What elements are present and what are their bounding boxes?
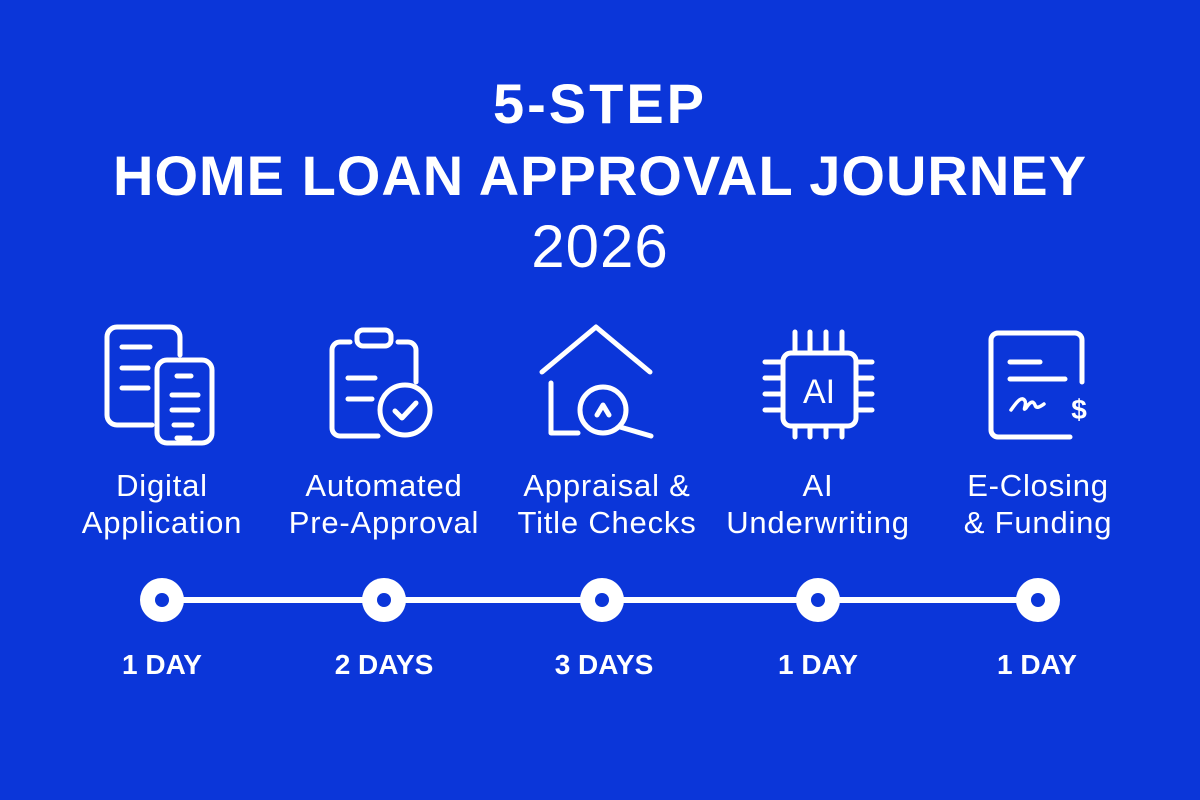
icon: clipboard check [332, 330, 430, 436]
label: step 2 [289, 468, 479, 540]
icon: AI chip [765, 332, 872, 437]
timeline [140, 578, 1060, 622]
step labels [82, 468, 1112, 540]
icon: documents [107, 327, 212, 443]
label: step 3: Appraisal & [523, 468, 691, 503]
label: step 4 [726, 468, 910, 540]
text: 3 DAYS [555, 649, 653, 680]
label: step 1: Digital [116, 468, 208, 503]
title: 5-STEP [493, 72, 707, 135]
durations [122, 649, 1077, 680]
icon: AI chip: AI [803, 373, 835, 411]
label: step 3 [518, 468, 696, 540]
label: step 5: & Funding [964, 505, 1112, 540]
title: 2026 [531, 213, 669, 280]
label: step 2: Automated [305, 468, 463, 503]
label: step 5 [964, 468, 1112, 540]
title [113, 72, 1087, 280]
label: step 5: E-Closing [967, 468, 1109, 503]
icon: e-closing document [991, 333, 1087, 437]
label: step 4: Underwriting [726, 505, 910, 540]
label: step 2: Pre-Approval [289, 505, 479, 540]
label: step 3: Title Checks [518, 505, 696, 540]
label: step 1 [82, 468, 242, 540]
text: 1 DAY [122, 649, 202, 680]
text: 1 DAY [778, 649, 858, 680]
label: step 4: AI [803, 468, 833, 503]
text: 2 DAYS [335, 649, 433, 680]
label: step 1: Application [82, 505, 242, 540]
text: 1 DAY [997, 649, 1077, 680]
icon: e-closing document: $ [1071, 394, 1087, 425]
icon: house magnifier [542, 327, 651, 436]
title: HOME LOAN APPROVAL JOURNEY [113, 144, 1087, 207]
